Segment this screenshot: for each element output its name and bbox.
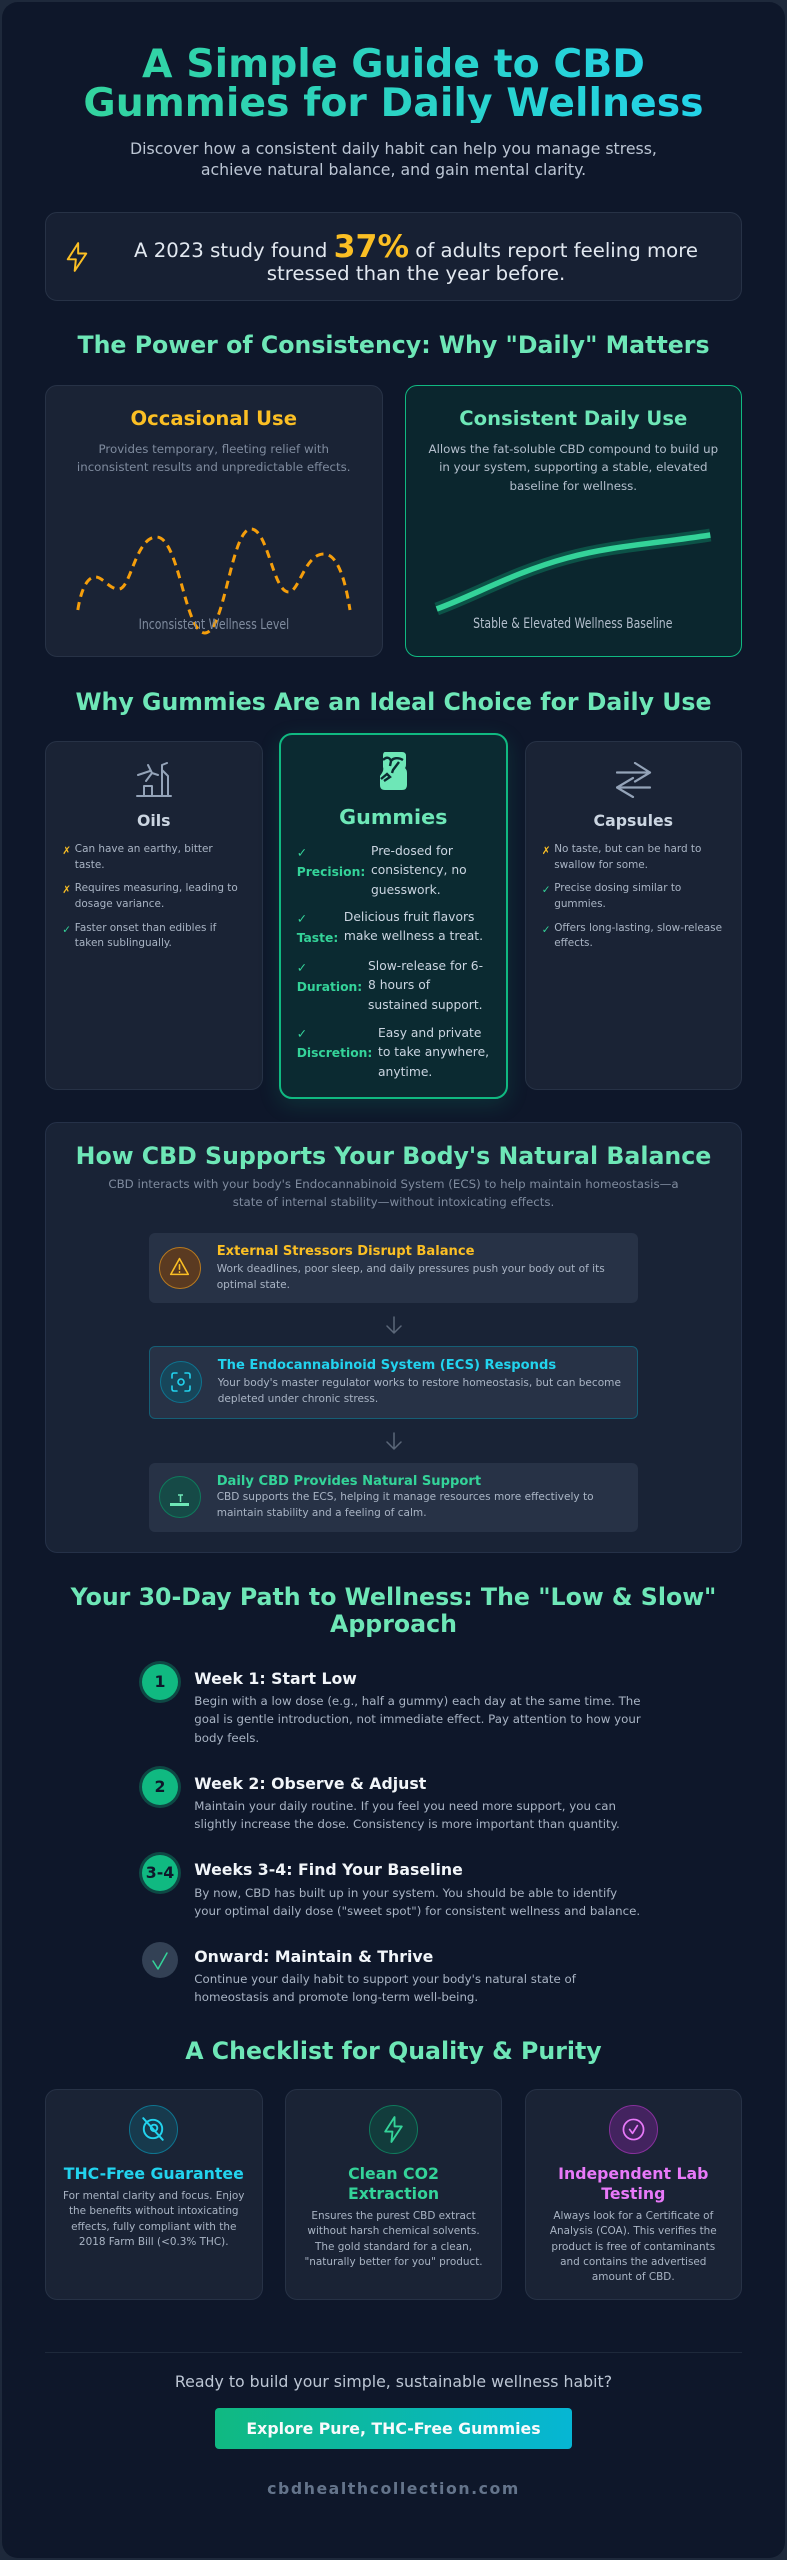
card text: Ensures the purest CBD extract [311,2210,476,2222]
icon: oils [136,762,172,797]
step text: body feels. [194,1731,259,1745]
step text: slightly increase the dose. Consistency is more important than quantity. [194,1817,620,1831]
description [108,1177,679,1209]
title: A Simple Guide to CBD [142,40,645,86]
chart label: Stable & Elevated Wellness Baseline [473,616,672,632]
panel description [77,442,351,474]
icon: capsules [616,762,652,798]
card text: Always look for a Certificate of [553,2210,713,2222]
step title: The Endocannabinoid System (ECS) Responds [218,1358,556,1373]
step text [217,1491,594,1519]
icon: warning [159,1247,201,1289]
panel description: Provides temporary, fleeting relief with [98,442,329,456]
title: Gummies for Daily Wellness [83,80,704,126]
benefit: duration: Slow-release for 6- [368,959,483,973]
list: oils points: Faster onset than edibles if [75,922,216,934]
statistic text: A 2023 study found 37% of adults report feeling more [134,228,698,264]
panel: capsules [525,741,742,1090]
panel: clean CO2 extraction [285,2089,502,2300]
list: oils points: Can have an earthy, bitter [75,843,213,855]
step text: goal is gentle introduction, not immediate effect. Pay attention to how your [194,1712,641,1726]
panel: independent lab testing [525,2089,742,2300]
step: week 2 [139,1766,620,1831]
call to action text: Ready to build your simple, sustainable wellness habit? [175,2372,612,2391]
step text: depleted under chronic stress. [218,1393,378,1405]
card text: For mental clarity and focus. Enjoy [63,2190,244,2202]
card text: Analysis (COA). This verifies the [550,2225,717,2237]
footer: website: cbdhealthcollection.com [267,2479,520,2498]
benefit: discretion: ✓ [297,1027,307,1041]
benefit: discretion [297,1026,489,1079]
benefit: duration: ✓ [297,961,307,975]
card text: amount of CBD. [592,2271,675,2283]
heading: gummies: Gummies [339,805,447,829]
subtitle: Discover how a consistent daily habit can help you manage stress, [130,139,657,158]
list: capsules points: swallow for some. [554,859,648,871]
benefit: taste [296,910,483,945]
step text [194,1972,576,2004]
card title [348,2164,439,2203]
step text: homeostasis and promote long-term well-being. [194,1990,478,2004]
step number [142,1664,178,1700]
step text: Maintain your daily routine. If you feel you need more support, you can [194,1799,616,1813]
benefit: precision: guesswork. [371,883,441,897]
description: state of internal stability—without intoxicating effects. [233,1195,554,1209]
step number: 3-4 [146,1863,174,1882]
card text: 2018 Farm Bill (<0.3% THC). [79,2236,229,2248]
card title: Clean CO2 [348,2164,439,2183]
subtitle [130,139,657,179]
icon: check [142,1942,178,1978]
button: Explore Pure, THC-Free Gummies [246,2419,541,2438]
step: onward [142,1942,576,2004]
heading: 30-day path: Your 30-Day Path to Wellness: The "Low & Slow" [71,1583,716,1611]
card text: product is free of contaminants [551,2241,715,2253]
card title: THC-Free Guarantee [64,2164,244,2183]
list: oils points: ✗ [62,884,71,896]
heading: why gummies: Why Gummies Are an Ideal Choice for Daily Use [75,688,712,716]
panel: consistent daily use [405,385,742,657]
benefit: duration [297,959,483,1012]
icon: eye off [129,2105,178,2154]
step number: 2 [155,1777,165,1796]
chart label: Inconsistent Wellness Level [139,617,289,633]
step text: Continue your daily habit to support your body's natural state of [194,1972,576,1986]
list: oils points [62,843,238,949]
callout: stress statistic [45,212,742,301]
statistic text: stressed than the year before. [267,262,565,285]
card text: without harsh chemical solvents. [307,2225,480,2237]
list: capsules points: gummies. [554,898,606,910]
chart: inconsistent wellness line [76,528,352,634]
benefit: taste: ✓ [297,912,307,926]
panel: how CBD supports balance [45,1122,742,1553]
panel: oils [45,741,262,1090]
list: capsules points: ✓ [542,884,550,896]
panel: THC-free guarantee [45,2089,262,2300]
step number [142,1855,178,1891]
benefit: discretion: to take anywhere, [378,1045,489,1059]
list: oils points: dosage variance. [75,898,164,910]
step text [194,1799,620,1831]
card text [550,2210,717,2283]
benefit: taste: make wellness a treat. [344,929,483,943]
icon: focus [160,1361,202,1403]
panel description: in your system, supporting a stable, elevated [439,460,708,474]
benefit: duration: sustained support. [368,998,483,1012]
panel: occasional use [45,385,382,657]
card text: the benefits without intoxicating [69,2205,239,2217]
step text [218,1377,621,1405]
list: oils points: ✓ [62,924,71,936]
icon: lightning bolt [66,242,88,272]
card title: Testing [601,2184,665,2203]
arrow [386,1432,402,1450]
step text [194,1694,641,1745]
step: daily CBD support [149,1463,638,1532]
step title: Daily CBD Provides Natural Support [217,1474,481,1489]
step: weeks 3-4 [139,1852,640,1918]
list: oils points: ✗ [62,845,71,857]
card text [304,2210,483,2268]
card text: effects, fully compliant with the [71,2221,236,2233]
button [215,2408,572,2449]
panel description [428,442,718,493]
step text: Begin with a low dose (e.g., half a gummy) each day at the same time. The [194,1694,641,1708]
icon: bolt [369,2105,418,2154]
step: ECS responds [149,1346,638,1419]
step text: Your body's master regulator works to restore homeostasis, but can become [218,1377,621,1389]
list: capsules points [542,843,722,949]
list: capsules points: Precise dosing similar to [554,882,681,894]
step text: By now, CBD has built up in your system. You should be able to identify [194,1886,617,1900]
benefit: discretion: anytime. [378,1065,432,1079]
benefit: precision [297,844,467,897]
card title [558,2164,708,2203]
panel: gummies [279,733,508,1099]
heading: the power of consistency: The Power of Consistency: Why "Daily" Matters [77,331,710,359]
list: capsules points: Offers long-lasting, slow-release [554,922,722,934]
benefit: precision: Pre-dosed for [371,844,453,858]
list: capsules points: ✓ [542,924,550,936]
list: capsules points: effects. [554,937,593,949]
icon: support [159,1476,201,1518]
card text: "naturally better for you" product. [304,2256,483,2268]
list: capsules points: ✗ [542,845,550,857]
benefit: taste: Taste: [297,931,338,945]
panel description: Allows the fat-soluble CBD compound to build up [428,442,718,456]
benefit: precision: consistency, no [371,863,467,877]
icon: gummy [380,752,407,790]
step text: CBD supports the ECS, helping it manage resources more effectively to [217,1491,594,1503]
card text: The gold standard for a clean, [315,2241,472,2253]
benefit: discretion: Discretion: [297,1046,372,1060]
heading: 30-day path [70,1583,716,1638]
step: week 1 [139,1661,641,1745]
list: oils points: taken sublingually. [75,937,172,949]
card text: and contains the advertised [560,2256,706,2268]
description: CBD interacts with your body's Endocannabinoid System (ECS) to help maintain homeostasis—a [108,1177,679,1191]
panel title: Oils [137,811,171,830]
step title: Onward: Maintain & Thrive [194,1947,433,1966]
card text [63,2190,244,2248]
step title: Week 2: Observe & Adjust [194,1774,426,1793]
panel title: Consistent Daily Use [459,407,687,430]
benefit: duration: Duration: [297,980,362,994]
card title: Extraction [348,2184,439,2203]
step text [194,1886,640,1918]
step text: Work deadlines, poor sleep, and daily pressures push your body out of its [217,1263,605,1275]
subtitle: achieve natural balance, and gain mental clarity. [201,160,586,179]
statistic text [134,228,698,285]
step number: 1 [155,1672,165,1691]
step text [217,1263,605,1291]
benefit: precision: Precision: [297,865,365,879]
benefit: duration: 8 hours of [368,978,430,992]
list: oils points: taste. [75,859,105,871]
panel title: Capsules [594,811,673,830]
panel description: baseline for wellness. [510,479,637,493]
benefit: taste: Delicious fruit flavors [344,910,474,924]
benefit: precision: ✓ [297,846,307,860]
panel title: Occasional Use [130,407,297,430]
step: external stressors [149,1233,638,1303]
step number [142,1769,178,1805]
step title: External Stressors Disrupt Balance [217,1244,475,1259]
benefit: discretion: Easy and private [378,1026,481,1040]
list: capsules points: No taste, but can be hard to [554,843,701,855]
chart: stable wellness baseline [434,528,712,632]
step text: optimal state. [217,1279,290,1291]
step title: Week 1: Start Low [194,1669,357,1688]
heading: How CBD Supports Your Body's Natural Balance [76,1142,711,1170]
icon: badge check [609,2105,658,2154]
title [45,44,742,123]
step title: Weeks 3-4: Find Your Baseline [194,1860,463,1879]
heading: checklist: A Checklist for Quality & Purity [185,2037,602,2065]
step text: your optimal daily dose ("sweet spot") for consistent wellness and balance. [194,1904,640,1918]
heading: 30-day path: Approach [330,1610,457,1638]
list: oils points: Requires measuring, leading to [75,882,238,894]
arrow [386,1316,402,1334]
panel description: inconsistent results and unpredictable effects. [77,460,351,474]
card title: Independent Lab [558,2164,708,2183]
step text: maintain stability and a feeling of calm. [217,1507,427,1519]
